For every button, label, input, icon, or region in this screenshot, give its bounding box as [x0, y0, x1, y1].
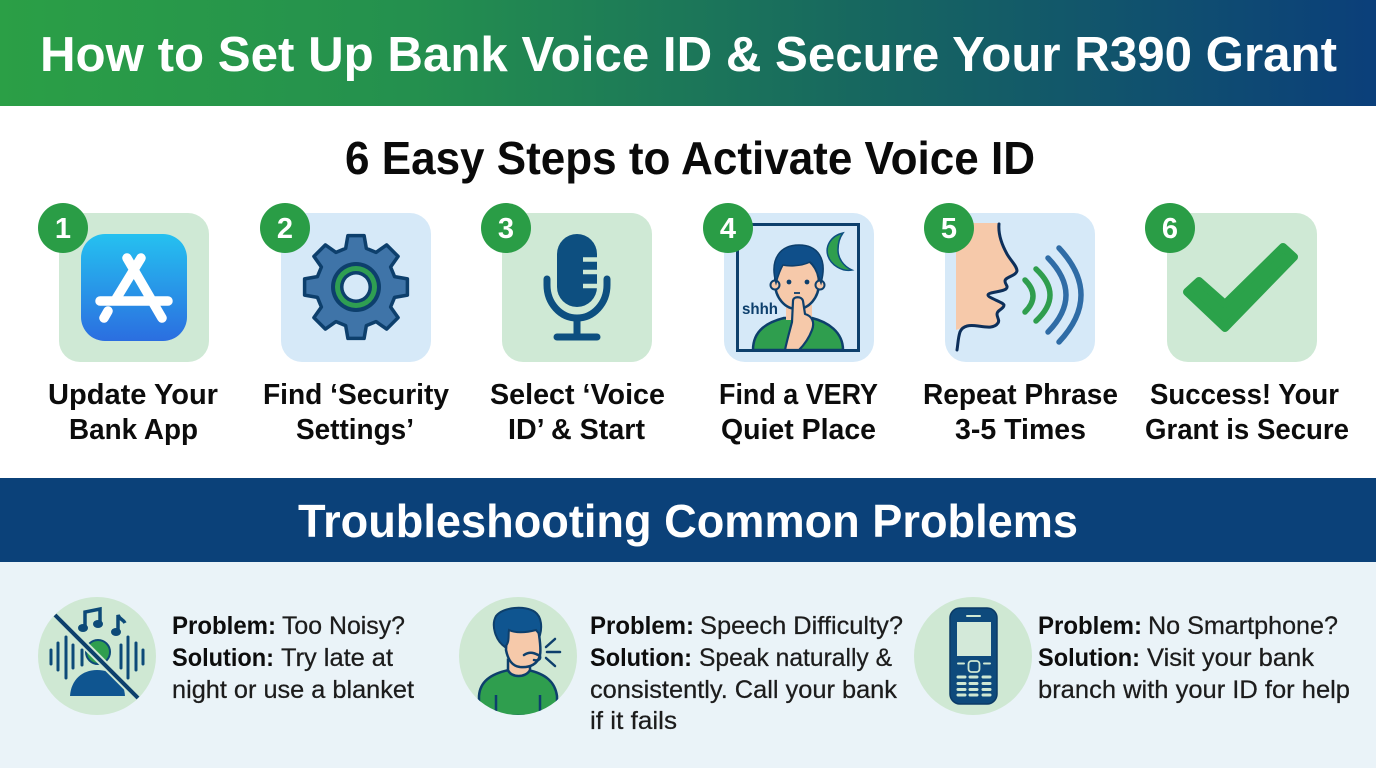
- step 6 label: [1145, 379, 1349, 446]
- icon: app store: [81, 234, 187, 341]
- step 5: repeat phrase: [923, 203, 1118, 446]
- problem 2 text: Speech Difficulty?: [700, 612, 903, 640]
- step 1 label: Update Your: [48, 379, 218, 411]
- step 6: success: [1145, 203, 1349, 446]
- icon: speaking face with sound waves: [956, 223, 1081, 350]
- step 3 label: ID’ & Start: [508, 414, 645, 446]
- problem 1: too noisy: [38, 597, 414, 715]
- icon: check mark: [1187, 247, 1294, 328]
- step 4 label: Find a VERY: [719, 379, 878, 411]
- problem 3 text: branch with your ID for help: [1038, 676, 1350, 704]
- step 6 label: Success! Your: [1150, 379, 1339, 411]
- icon: muted noise: [38, 597, 156, 715]
- steps heading: 6 Easy Steps to Activate Voice ID: [345, 132, 1035, 184]
- problem 2 text: if it fails: [590, 707, 677, 735]
- icon: basic phone: [914, 597, 1032, 715]
- title banner: How to Set Up Bank Voice ID & Secure Your R390 Grant: [40, 28, 1337, 82]
- problem 3 text: Solution:: [1038, 644, 1140, 672]
- step 2: security settings: [260, 203, 449, 446]
- step 1 label: Bank App: [69, 414, 198, 446]
- step 3: select voice id: [481, 203, 665, 446]
- step 2 label: Settings’: [296, 414, 414, 446]
- step 1: update app: [38, 203, 218, 446]
- step number 2: [260, 203, 310, 253]
- problem 1 text: night or use a blanket: [172, 676, 414, 704]
- step 2 label: [263, 379, 449, 446]
- problem 3 text: [1038, 612, 1350, 704]
- step 4: quiet place: [703, 203, 878, 446]
- problem 2 text: Solution:: [590, 644, 692, 672]
- step number 4: [703, 203, 753, 253]
- problem 1 text: Too Noisy?: [282, 612, 405, 640]
- step 4 label: Quiet Place: [721, 414, 876, 446]
- step 5 label: Repeat Phrase: [923, 379, 1118, 411]
- step number 3: [481, 203, 531, 253]
- icon: person saying shhh: shhh: [742, 301, 778, 318]
- problem 2 text: Problem:: [590, 612, 694, 640]
- step 6 label: Grant is Secure: [1145, 414, 1349, 446]
- problem 3: no smartphone: [914, 597, 1350, 715]
- step 5 label: [923, 379, 1118, 446]
- problem 3 text: Problem:: [1038, 612, 1142, 640]
- problem 3 text: Visit your bank: [1147, 644, 1315, 672]
- icon: person saying shhh: [738, 224, 858, 350]
- title banner: [0, 0, 1376, 106]
- problem 1 text: Solution:: [172, 644, 274, 672]
- step number 6: 6: [1162, 213, 1178, 245]
- problem 1 text: [172, 612, 414, 704]
- step number 5: [924, 203, 974, 253]
- step number 4: 4: [720, 213, 736, 245]
- icon: person with speech difficulty: [459, 597, 577, 716]
- step 2 label: Find ‘Security: [263, 379, 449, 411]
- step number 6: [1145, 203, 1195, 253]
- step 5 label: 3-5 Times: [955, 414, 1086, 446]
- problem 2: speech difficulty: [459, 597, 903, 735]
- step number 5: 5: [941, 213, 957, 245]
- problem 2 text: Speak naturally &: [699, 644, 892, 672]
- step 4 label: [719, 379, 878, 446]
- step number 1: 1: [55, 213, 71, 245]
- panel: troubleshooting problems: [0, 562, 1376, 768]
- step number 2: 2: [277, 213, 293, 245]
- icon: gear: [305, 236, 407, 338]
- problem 2 text: consistently. Call your bank: [590, 676, 897, 704]
- problem 3 text: No Smartphone?: [1148, 612, 1338, 640]
- troubleshooting banner: Troubleshooting Common Problems: [298, 495, 1078, 547]
- icon: microphone: [547, 234, 607, 337]
- step 1 label: [48, 379, 218, 446]
- troubleshooting banner: [0, 478, 1376, 562]
- problem 1 text: Problem:: [172, 612, 276, 640]
- step 3 label: Select ‘Voice: [490, 379, 665, 411]
- problem 2 text: [590, 612, 903, 735]
- step 3 label: [490, 379, 665, 446]
- step number 1: [38, 203, 88, 253]
- problem 1 text: Try late at: [281, 644, 393, 672]
- step number 3: 3: [498, 213, 514, 245]
